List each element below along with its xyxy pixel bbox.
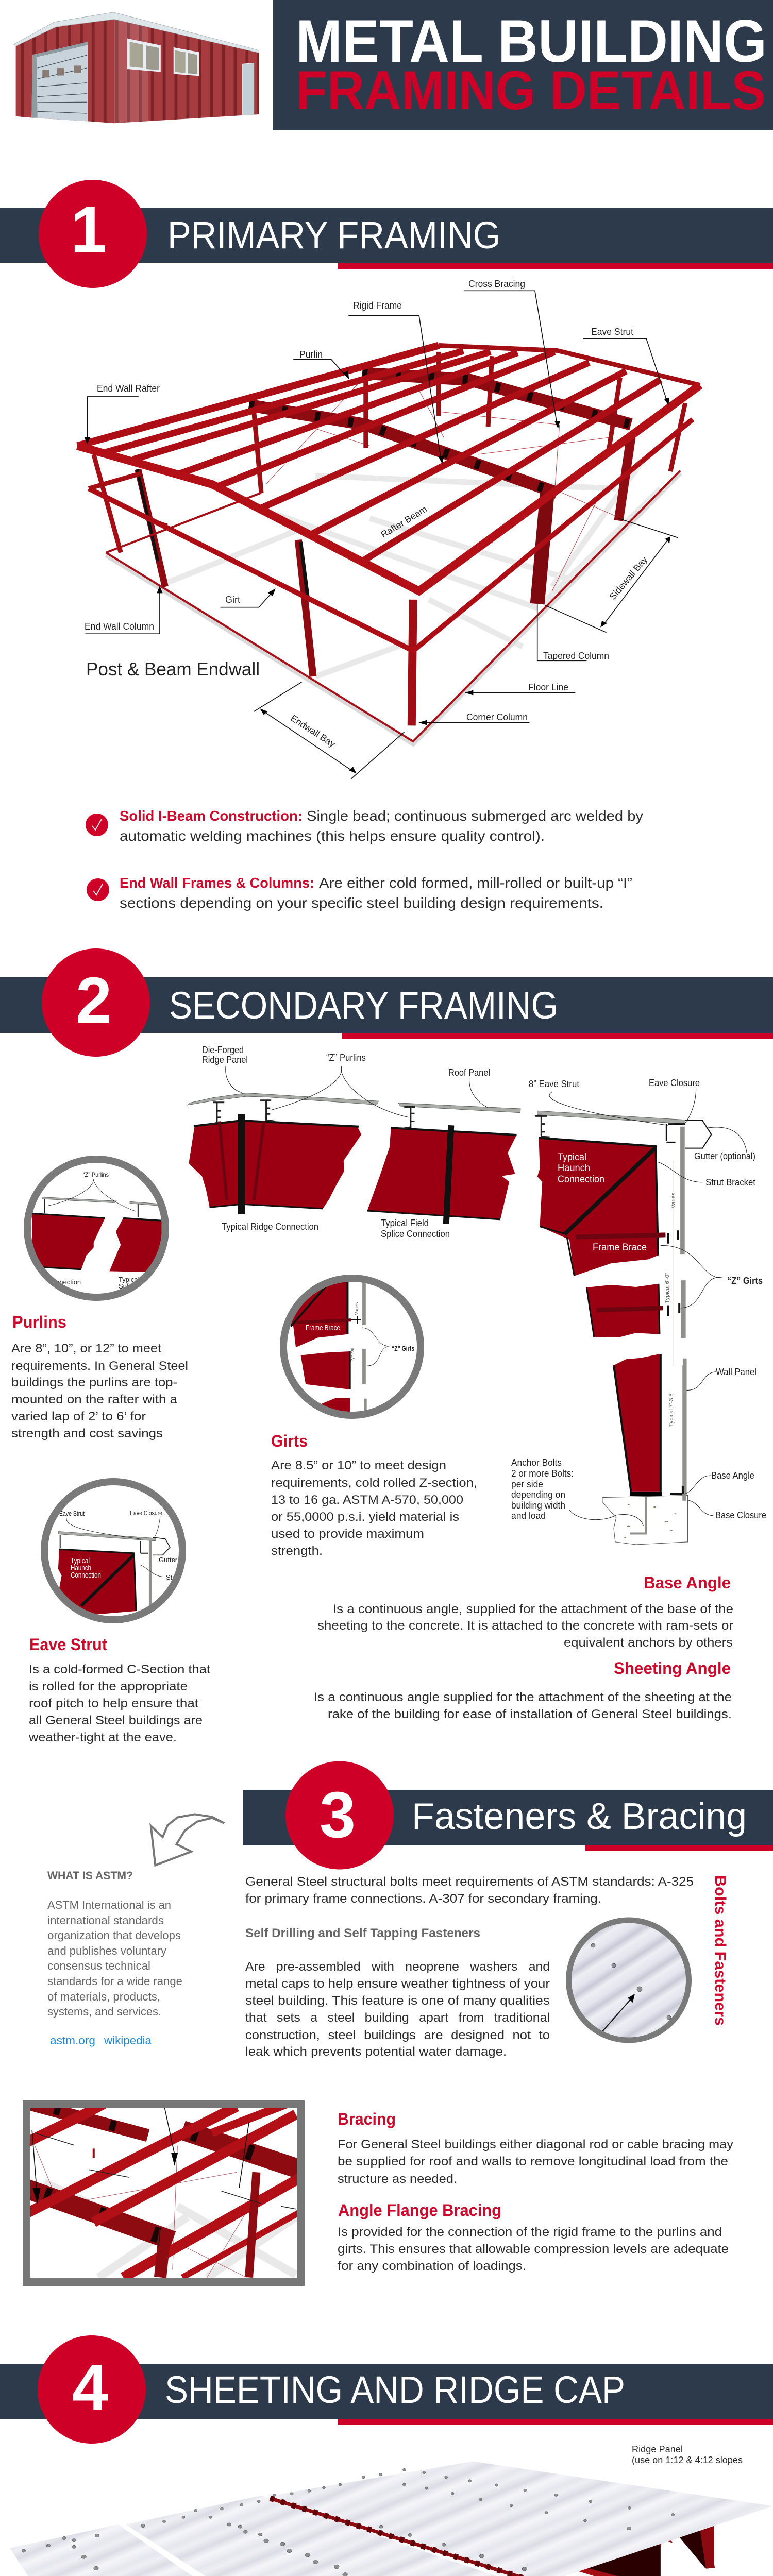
circle detail: girts: “Z” Girts	[392, 1344, 414, 1352]
header building illustration	[14, 12, 259, 123]
text: angle flange bracing: Is provided for the connection of the rigid frame to the purlins and	[338, 2225, 722, 2239]
text: purlins: buildings the purlins are top-	[11, 1376, 177, 1389]
ridge, splice and haunch connection diagram: Varies	[670, 1192, 677, 1208]
base angle and anchor bolts diagram: Base Closure	[715, 1510, 766, 1520]
eave strut and purlins	[188, 2509, 715, 2576]
primary framing diagram: Cross Bracing	[468, 279, 525, 289]
base angle and anchor bolts diagram: Wall Panel	[716, 1367, 757, 1377]
circle detail: purlins: “Z” Purlins	[83, 1171, 109, 1178]
text: purlins: strength and cost savings	[11, 1427, 163, 1440]
circle detail: girts: Frame Brace	[306, 1324, 340, 1332]
ridge, splice and haunch connection diagram: Roof Panel	[448, 1067, 490, 1078]
base angle and anchor bolts diagram: 2 or more Bolts:	[511, 1468, 574, 1479]
text: structural bolts	[245, 1875, 694, 1906]
text: purlins: Purlins	[12, 1313, 66, 1331]
text: purlins: Are 8”, 10”, or 12” to meet	[11, 1342, 161, 1355]
text: girts: requirements, cold rolled Z-section,	[271, 1476, 477, 1490]
text: purlins: mounted on the rafter with a	[11, 1393, 178, 1406]
section 2 banner: SECONDARY FRAMING	[169, 984, 558, 1027]
text: eave strut: roof pitch to help ensure that	[29, 1697, 198, 1710]
roof sheeting diagram: (use on 1:12 & 4:12 slopes	[632, 2455, 743, 2465]
circle detail: purlins: Splice	[119, 1282, 137, 1290]
circle detail: purlins: Typical Field	[119, 1276, 156, 1283]
text: base angle: sheeting to the concrete. It is attached to the concrete with ram-sets or	[317, 1619, 733, 1633]
section 4 banner	[0, 2335, 773, 2444]
text: angle flange bracing	[338, 2201, 729, 2273]
text: eave strut: all General Steel buildings are	[29, 1714, 203, 1727]
ridge, splice and haunch connection diagram: 8” Eave Strut	[529, 1079, 579, 1089]
text: sheeting angle: rake of the building for ease of installation of General Steel buildings.	[328, 1707, 732, 1721]
section 2 banner: 2	[76, 964, 112, 1037]
text: eave strut: Eave Strut	[29, 1635, 107, 1654]
text: girts: or 55,0000 p.s.i. yield material is	[271, 1510, 459, 1524]
primary framing diagram: Post & Beam Endwall	[86, 658, 260, 680]
text: purlins: requirements. In General Steel	[11, 1359, 188, 1373]
sidebar: what is ASTM: wikipedia	[104, 2034, 152, 2047]
sidebar: what is ASTM: ASTM International is an	[47, 1899, 171, 1911]
text: base angle: equivalent anchors by others	[564, 1636, 733, 1650]
section 4 banner: SHEETING AND RIDGE CAP	[165, 2368, 625, 2411]
primary framing diagram	[77, 279, 700, 779]
base angle and anchor bolts diagram: and load	[511, 1511, 546, 1521]
circle detail: eave strut	[44, 1482, 207, 1620]
circle detail: eave strut: Haunch	[71, 1564, 91, 1572]
base angle and anchor bolts diagram: building width	[511, 1500, 565, 1511]
icon: curved arrow	[151, 1814, 224, 1865]
ridge, splice and haunch connection diagram: Die-Forged	[202, 1045, 244, 1055]
title panel	[273, 0, 773, 130]
check icon: solid I-beam	[86, 814, 108, 836]
circle detail: girts: Typical	[350, 1348, 355, 1362]
text: sheeting angle: Is a continuous angle supplied for the attachment of the sheeting at the	[314, 1690, 732, 1704]
ridge, splice and haunch connection diagram: Strut Bracket	[705, 1177, 755, 1188]
primary framing diagram: Sidewall Bay	[608, 554, 649, 602]
ridge, splice and haunch connection diagram: Splice Connection	[381, 1229, 450, 1239]
leader lines and arrows	[85, 291, 678, 779]
sidebar: what is ASTM: astm.org	[50, 2034, 95, 2047]
circle detail: eave strut: Typical	[71, 1556, 90, 1565]
ridge, splice and haunch connection diagram: Haunch	[558, 1163, 590, 1174]
text: sheeting angle	[314, 1659, 732, 1721]
sidebar: what is ASTM: and publishes voluntary	[47, 1944, 166, 1957]
primary framing diagram: Floor Line	[528, 682, 568, 692]
text: bracing: Bracing	[338, 2110, 396, 2128]
text: self drilling fasteners: steel building. This feature is one of many qualities	[245, 1994, 550, 2008]
text: end wall frames and columns: sections depending on your specific steel building design requirements.	[120, 895, 603, 911]
ridge, splice and haunch connection diagram: “Z” Girts	[727, 1276, 763, 1286]
base angle and anchor bolts diagram	[511, 1365, 766, 1545]
text: angle flange bracing: Angle Flange Bracing	[338, 2201, 501, 2219]
text: girts: strength.	[271, 1544, 323, 1558]
sidebar: what is ASTM: WHAT IS ASTM?	[47, 1869, 133, 1882]
text: angle flange bracing: girts. This ensures that allowable compression levels are adequate	[338, 2242, 729, 2256]
base angle and anchor bolts diagram: Anchor Bolts	[511, 1458, 562, 1468]
primary framing diagram: Tapered Column	[543, 651, 609, 661]
ridge, splice and haunch connection diagram: Connection	[558, 1174, 604, 1185]
text: solid I-beam construction: automatic welding machines (this helps ensure quality control).	[120, 828, 545, 844]
base angle and anchor bolts diagram: per side	[511, 1479, 543, 1489]
primary framing diagram: Eave Strut	[591, 327, 633, 337]
text: self drilling fasteners	[245, 1926, 550, 2059]
leader lines	[226, 1066, 747, 1308]
ridge, splice and haunch connection diagram: Gutter (optional)	[694, 1151, 755, 1161]
text: structural bolts: General Steel structural bolts meet requirements of ASTM standards: A-325	[245, 1875, 694, 1889]
sidebar: what is ASTM: organization that develops	[47, 1929, 181, 1942]
ridge, splice and haunch connection diagram: Frame Brace	[593, 1242, 647, 1253]
primary framing diagram: Corner Column	[466, 712, 528, 722]
primary framing diagram: End Wall Rafter	[97, 383, 160, 394]
primary framing diagram: Rigid Frame	[353, 300, 402, 311]
text: eave strut	[28, 1635, 210, 1744]
circle detail: girts: Varies	[354, 1302, 359, 1315]
circle detail: girts	[276, 1278, 421, 1415]
text: sheeting angle: Sheeting Angle	[614, 1659, 731, 1677]
text: girts: Are 8.5” or 10” to meet design	[271, 1459, 446, 1472]
text: purlins: varied lap of 2’ to 6’ for	[11, 1410, 146, 1423]
text: self drilling fasteners: Are pre-assembled with neoprene washers and	[245, 1960, 550, 1974]
section 1 banner: PRIMARY FRAMING	[167, 214, 500, 257]
ridge, splice and haunch connection diagram: Eave Closure	[649, 1078, 700, 1088]
sidebar: what is ASTM: of materials, products,	[47, 1990, 160, 2003]
text: bracing: be supplied for roof and walls to remove longitudinal load from the	[338, 2155, 728, 2168]
section 3 banner: 3	[320, 1778, 356, 1851]
section 1 banner	[0, 180, 773, 288]
section 1 banner: 1	[71, 193, 107, 266]
text: girts	[271, 1432, 477, 1558]
text: purlins	[11, 1313, 188, 1440]
ridge, splice and haunch connection diagram: Typical	[558, 1152, 586, 1163]
ridge, splice and haunch connection diagram	[188, 1045, 763, 1500]
circle detail: purlins: nnection	[56, 1278, 81, 1286]
section 3 banner	[243, 1761, 773, 1869]
text: end wall frames and columns: Are either cold formed, mill-rolled or built-up “I”	[319, 875, 632, 891]
base angle and anchor bolts diagram: Base Angle	[711, 1470, 754, 1481]
framed photo: bracing	[23, 2098, 305, 2286]
base angle and anchor bolts diagram: Typical 7’-3.5”	[668, 1391, 675, 1427]
text: base angle: Base Angle	[644, 1573, 731, 1592]
text: end wall frames and columns	[120, 875, 632, 911]
text: end wall frames and columns: End Wall Frames & Columns:	[120, 875, 314, 891]
sidebar: what is ASTM: standards for a wide range	[47, 1975, 182, 1988]
primary framing diagram: Purlin	[299, 349, 323, 360]
text: self drilling fasteners: that sets a steel building apart from traditional	[245, 2011, 550, 2025]
check icon: end wall frames	[87, 878, 109, 901]
text: self drilling fasteners: construction, steel buildings are designed not to	[245, 2028, 550, 2042]
circle detail: purlins	[27, 1159, 165, 1297]
text: bracing: For General Steel buildings either diagonal rod or cable bracing may	[338, 2138, 733, 2151]
circle detail: roof fasteners	[566, 1917, 692, 2043]
text: structural bolts: for primary frame connections. A-307 for secondary framing.	[245, 1892, 601, 1906]
text: solid I-beam construction	[120, 808, 643, 844]
primary framing diagram: Girt	[225, 595, 240, 605]
text: base angle: Is a continuous angle, supplied for the attachment of the base of the	[333, 1602, 733, 1616]
ridge, splice and haunch connection diagram: “Z” Purlins	[326, 1053, 366, 1063]
primary framing diagram: Endwall Bay	[289, 713, 337, 749]
text: eave strut: weather-tight at the eave.	[28, 1731, 177, 1744]
text: eave strut: Is a cold-formed C-Section that	[29, 1663, 210, 1676]
circle detail: eave strut: Gutter (optional)	[159, 1556, 207, 1564]
ridge, splice and haunch connection diagram: Typical Ridge Connection	[222, 1222, 318, 1232]
text: self drilling fasteners: Self Drilling and Self Tapping Fasteners	[245, 1926, 480, 1940]
text: bracing	[338, 2110, 733, 2186]
sidebar: what is ASTM: systems, and services.	[47, 2005, 161, 2018]
primary framing diagram: Rafter Beam	[379, 504, 429, 540]
text: self drilling fasteners: leak which prevents potential water damage.	[245, 2045, 507, 2059]
text: base angle	[317, 1573, 733, 1650]
text: bracing: structure as needed.	[338, 2172, 457, 2186]
section 4 banner: 4	[72, 2351, 108, 2424]
circle detail: eave strut: Connection	[71, 1571, 101, 1580]
roof sheeting diagram: Ridge Panel	[632, 2444, 683, 2454]
sidebar: what is ASTM: consensus technical	[47, 1959, 150, 1972]
sidebar: what is ASTM: international standards	[47, 1914, 164, 1927]
text: self drilling fasteners: metal caps to help ensure weather tightness of your	[245, 1977, 550, 1991]
text: girts: used to provide maximum	[271, 1527, 424, 1541]
text: eave strut: is rolled for the appropriate	[29, 1680, 188, 1693]
ridge, splice and haunch connection diagram: Typical Field	[381, 1218, 429, 1228]
text: girts: 13 to 16 ga. ASTM A-570, 50,000	[271, 1493, 463, 1507]
section 2 banner	[0, 948, 773, 1057]
ridge, splice and haunch connection diagram: Ridge Panel	[202, 1055, 248, 1065]
circle detail: eave strut: Strut Bracket	[166, 1573, 205, 1581]
circle detail: eave strut: Eave Strut	[59, 1510, 85, 1517]
text: solid I-beam construction: Solid I-Beam Construction:	[120, 808, 303, 824]
text: angle flange bracing: for any combination of loadings.	[338, 2259, 526, 2273]
text: girts: Girts	[271, 1432, 308, 1450]
base angle and anchor bolts diagram: depending on	[511, 1489, 565, 1500]
section 3 banner: Fasteners & Bracing	[412, 1796, 747, 1837]
primary framing diagram: End Wall Column	[85, 621, 154, 632]
text: solid I-beam construction: Single bead; continuous submerged arc welded by	[307, 808, 643, 824]
circle detail: eave strut: Eave Closure	[130, 1509, 162, 1517]
roof sheeting diagram	[10, 2444, 773, 2576]
sidebar: what is ASTM	[47, 1869, 182, 2047]
vertical label: bolts and fasteners: Bolts and Fasteners	[712, 1875, 729, 2026]
ridge, splice and haunch connection diagram: Typical 6’-0”	[664, 1273, 670, 1303]
